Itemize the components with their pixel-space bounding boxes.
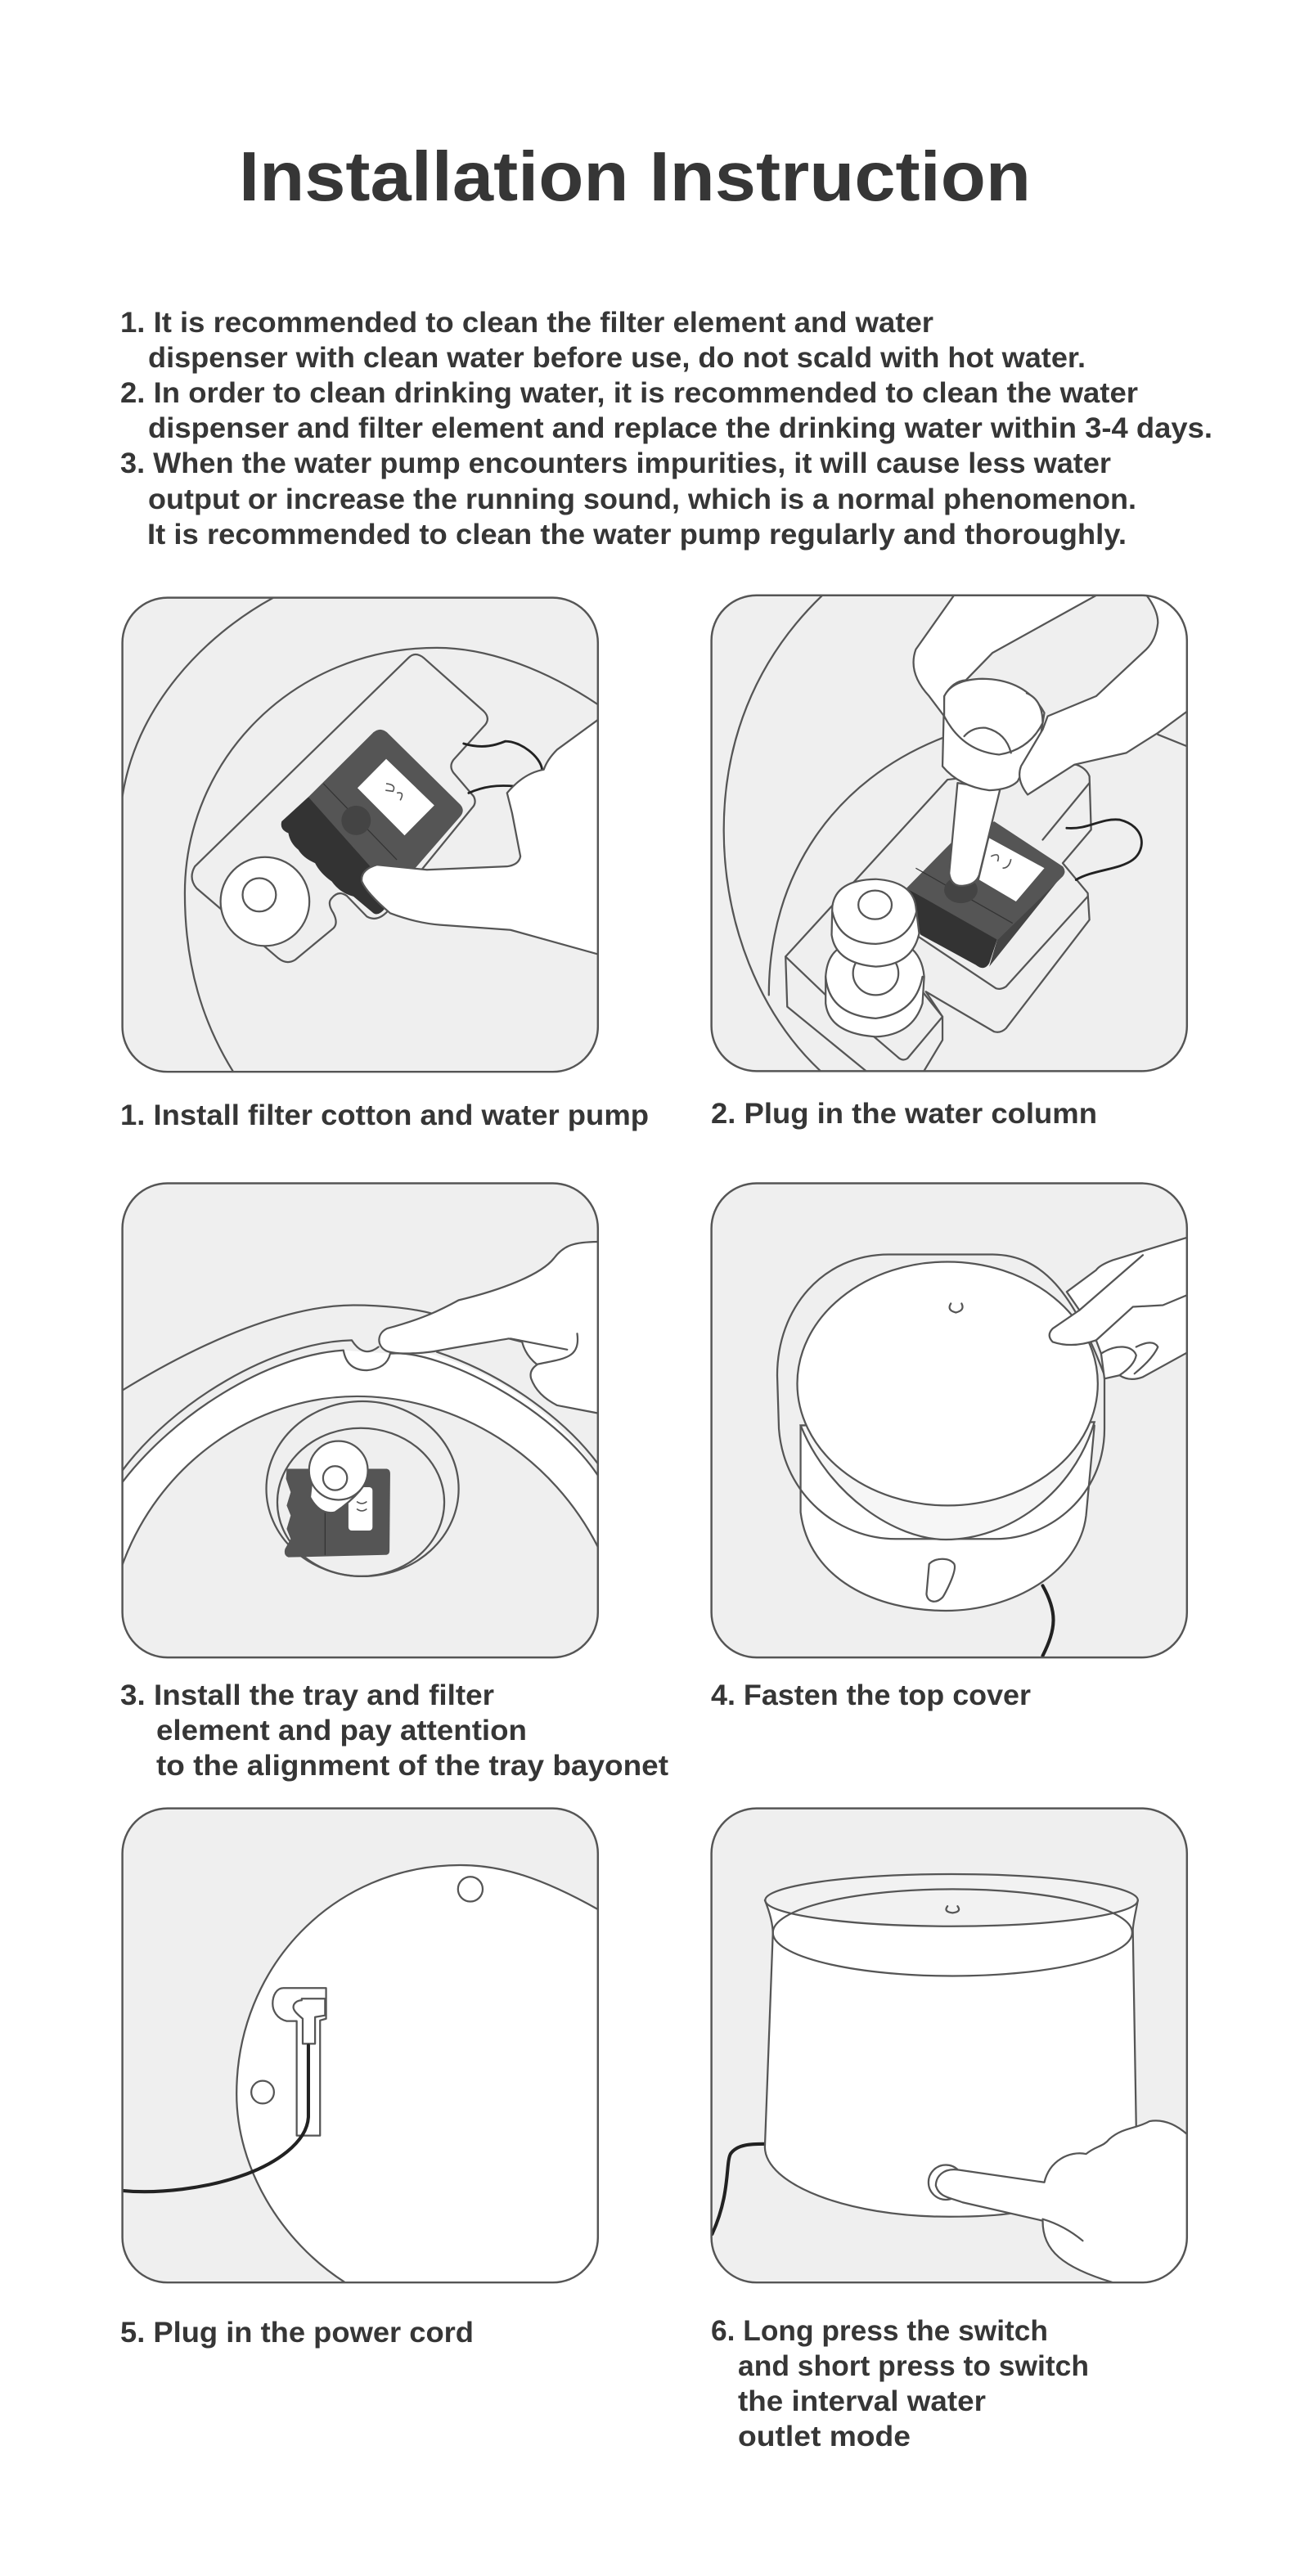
panel: step 2 plug in the water column — [712, 592, 1190, 1073]
caption: step 6: the interval water — [738, 2385, 986, 2417]
fountain body — [777, 1254, 1104, 1611]
text block: usage notes: dispenser with clean water before use, do not scald with hot water. — [148, 342, 1086, 374]
caption: step 5: 5. Plug in the power cord — [120, 2317, 474, 2349]
filter discs — [825, 879, 924, 1036]
icon: water pump — [281, 730, 463, 914]
caption: step 6: 6. Long press the switch — [711, 2315, 1048, 2347]
text block: usage notes: 3. When the water pump encounters impurities, it will cause less water — [120, 447, 1111, 479]
caption: step 6: outlet mode — [738, 2421, 911, 2452]
caption: step 6 — [711, 2315, 1089, 2452]
caption: step 3: element and pay attention — [156, 1715, 527, 1747]
power cable — [712, 2144, 765, 2234]
power cable — [1042, 1585, 1054, 1656]
cable — [464, 741, 542, 793]
text block: usage notes: output or increase the running sound, which is a normal phenomenon. — [148, 483, 1136, 515]
caption: step 3 — [120, 1679, 668, 1782]
fountain body — [765, 1874, 1138, 2217]
hand — [1050, 1237, 1190, 1379]
panel: step 4 fasten the top cover — [712, 1184, 1190, 1657]
panel: step 5 plug in the power cord — [123, 1809, 601, 2284]
text block: usage notes: It is recommended to clean the water pump regularly and thoroughly. — [147, 519, 1127, 551]
fountain base — [236, 1865, 601, 2284]
cable — [1067, 820, 1141, 880]
power cord — [123, 2045, 308, 2192]
hand — [362, 718, 601, 955]
panel: step 6 long press the switch — [712, 1809, 1190, 2284]
hand — [379, 1242, 601, 1414]
caption: step 3: to the alignment of the tray bayonet — [156, 1750, 668, 1782]
hand — [936, 2120, 1190, 2284]
tray — [785, 765, 1091, 1073]
tray — [192, 654, 488, 962]
panel: step 1 install filter cotton and water pump — [123, 598, 601, 1072]
cord slot and plug — [272, 1988, 326, 2136]
tray ring — [123, 1304, 597, 1577]
text block: usage notes: 1. It is recommended to clean the filter element and water — [120, 307, 933, 339]
panel: step 3 install the tray and filter element — [119, 1184, 601, 1662]
caption: step 6: and short press to switch — [738, 2350, 1089, 2382]
base holes — [251, 1877, 483, 2103]
icon: water pump — [906, 821, 1065, 968]
text block: usage notes: dispenser and filter element and replace the drinking water within 3-4 days. — [148, 412, 1212, 444]
text block: usage notes: 2. In order to clean drinking water, it is recommended to clean the water — [120, 377, 1138, 409]
title: Installation Instruction — [239, 138, 1031, 216]
icon: pump and filter disc — [285, 1441, 390, 1558]
caption: step 2: 2. Plug in the water column — [711, 1098, 1097, 1130]
caption: step 1: 1. Install filter cotton and water pump — [120, 1099, 649, 1131]
switch button — [929, 2165, 963, 2200]
text block: usage notes — [120, 307, 1212, 551]
water column — [942, 679, 1045, 886]
caption: step 3: 3. Install the tray and filter — [120, 1679, 494, 1711]
hand — [914, 592, 1190, 794]
filter disc — [221, 857, 309, 946]
caption: step 4: 4. Fasten the top cover — [711, 1679, 1031, 1711]
